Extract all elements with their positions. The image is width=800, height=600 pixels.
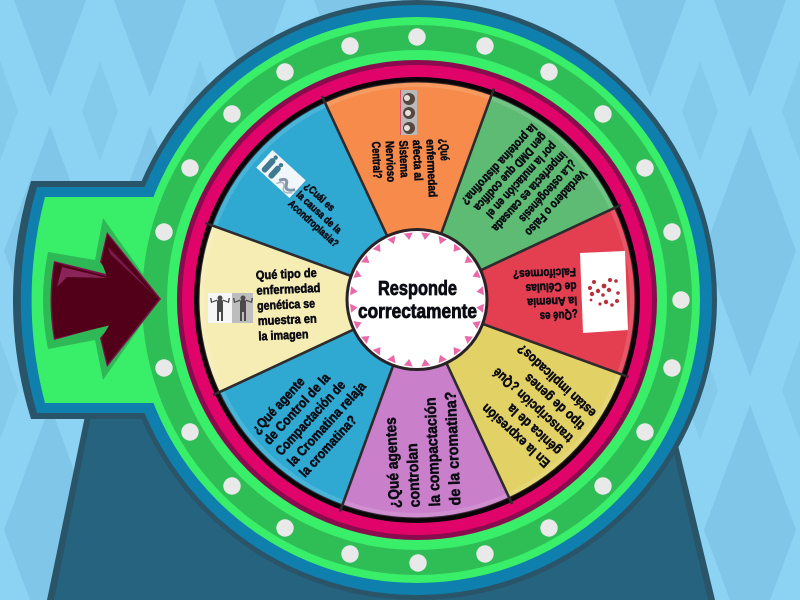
wheel slices: [196, 79, 638, 521]
slice: cream: [196, 217, 421, 393]
question text: lower blue slice: de Control de la: [260, 370, 333, 447]
slice: blue lower: [208, 244, 478, 517]
question text: orange slice: Sistema: [396, 140, 412, 178]
question text: orange slice: afecta al: [410, 140, 426, 181]
question text: cream slice: Qué tipo de: [255, 266, 317, 283]
question text: orange slice: ¿Qué: [437, 138, 452, 161]
question text: yellow slice: transcripción ¿Qué: [489, 365, 576, 446]
question text: yellow slice: tipo de genes: [521, 371, 587, 433]
question text: green slice: [459, 121, 590, 254]
question text: green slice: imperfecta es causada: [489, 149, 570, 235]
slice: red: [413, 207, 638, 383]
question text: lower blue slice: Compactación de: [272, 377, 349, 458]
question text: yellow slice: En la expresión: [479, 401, 553, 471]
question text: red slice: [513, 265, 578, 325]
question text: purple slice: controlan: [404, 443, 424, 508]
question text: green slice: por la mutación en el: [483, 139, 560, 221]
question text: red slice: ¿Qué es: [539, 308, 578, 324]
question text: green slice: ¿La osteogénesis: [516, 158, 580, 226]
icon: three brain scans: [400, 90, 417, 135]
question text: cream slice: la imagen: [258, 327, 309, 343]
hub title: [358, 278, 477, 323]
question text: lower blue slice: ¿Qué agente: [249, 374, 308, 437]
dots ring: [155, 28, 690, 572]
question text: yellow slice: están implicados?: [514, 341, 599, 421]
question text: purple slice: [382, 391, 464, 509]
question text: green slice: gen DMD que codifica: [471, 130, 550, 214]
slice: blue upper: [200, 91, 473, 361]
question text: orange slice: enfermedad: [423, 139, 440, 198]
question text: upper blue slice: ¿Cuál es: [302, 180, 337, 214]
hub title: Responde: [378, 278, 457, 300]
question text: yellow slice: [466, 340, 599, 471]
question text: red slice: Falciformes?: [513, 265, 576, 282]
question text: upper blue slice: la causa de la: [294, 189, 344, 236]
question text: orange slice: Central?: [369, 141, 385, 179]
question text: green slice: la proteína distrofina?: [459, 121, 540, 208]
question text: orange slice: [369, 138, 454, 200]
hub triangles: [350, 232, 484, 367]
slice: purple: [334, 296, 510, 521]
question text: purple slice: la compactación: [422, 397, 444, 507]
question text: lower blue slice: [249, 346, 381, 480]
question text: lower blue slice: la Cromatina relaja: [284, 378, 369, 469]
center hub: [347, 230, 487, 370]
hub title: correctamente: [358, 301, 477, 323]
icon: family and DNA image: [256, 150, 306, 198]
question text: red slice: de Células: [525, 279, 577, 295]
slice: yellow: [361, 239, 634, 509]
icon: sickle cells image: [580, 251, 628, 333]
question text: upper blue slice: [286, 180, 357, 250]
question text: purple slice: de la cromatina?: [443, 391, 464, 506]
question text: purple slice: ¿Qué agentes: [383, 417, 404, 509]
question text: cream slice: enfermedad: [256, 281, 321, 298]
inner rings: [167, 50, 667, 550]
question text: cream slice: genética se: [257, 296, 315, 313]
slice: orange: [324, 79, 500, 304]
question text: yellow slice: génica de la: [504, 401, 564, 458]
arrow pointer: [43, 218, 161, 380]
wheel stand: [47, 416, 715, 600]
icon: skeletal figures image: [208, 293, 253, 323]
question text: upper blue slice: Acondroplasia?: [286, 198, 341, 250]
slice: green: [356, 83, 626, 356]
question text: red slice: la Anemia: [527, 294, 577, 310]
question text: cream slice: muestra en: [257, 312, 317, 328]
question text: green slice: Verdadero o Falso: [522, 167, 590, 239]
question text: orange slice: Nervioso: [383, 141, 398, 182]
question text: lower blue slice: la cromatina?: [296, 412, 360, 480]
question text: cream slice: [255, 266, 323, 343]
